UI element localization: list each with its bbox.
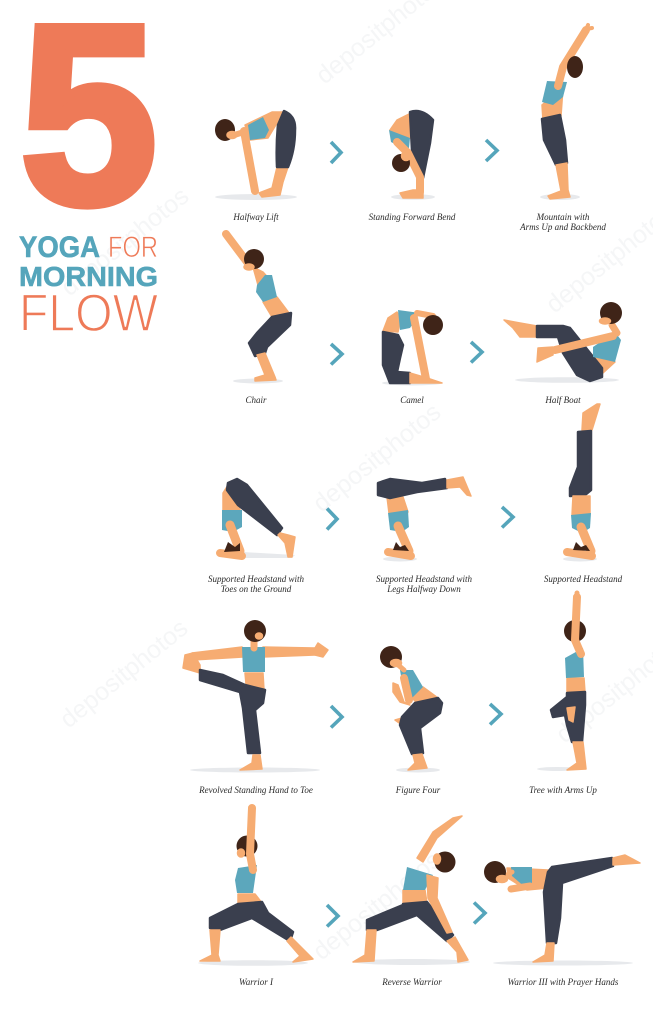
title block: [19, 0, 158, 343]
arrow: [474, 902, 485, 924]
arrow: [331, 344, 342, 364]
label: Camel: [400, 395, 424, 405]
label: Figure Four: [395, 785, 441, 795]
figure: Figure Four: [380, 646, 442, 772]
figure: Revolved Standing Hand to Toe: [183, 620, 328, 772]
label second line: Arms Up and Backbend: [519, 222, 606, 232]
arrow: [331, 142, 341, 163]
arrow: [471, 342, 482, 362]
label: Chair: [245, 395, 267, 405]
panel: Half Boat: [504, 302, 622, 405]
arrow: [331, 706, 342, 728]
figure: Reverse Warrior: [353, 816, 470, 965]
label: Tree with Arms Up: [529, 785, 597, 795]
panel: Reverse Warrior: [353, 816, 470, 987]
arrow: [490, 704, 501, 724]
heading word FLOW: FLOW: [19, 284, 158, 343]
panel: Camel: [382, 310, 443, 405]
panel: Chair: [226, 234, 291, 405]
label: Reverse Warrior: [381, 977, 442, 987]
panel: Standing Forward Bend: [369, 111, 456, 222]
label: Standing Forward Bend: [369, 212, 456, 222]
label: Halfway Lift: [232, 212, 279, 222]
arrow: [486, 140, 497, 161]
label: Warrior I: [239, 977, 274, 987]
label second line: Toes on the Ground: [221, 584, 292, 594]
panel: Halfway Lift: [215, 111, 297, 222]
panel: Tree with Arms Up: [529, 593, 597, 795]
figure: Supported Headstand: [563, 404, 600, 562]
figure: Halfway Lift: [215, 111, 297, 200]
figure: Warrior III with Prayer Hands: [484, 855, 640, 966]
figure: Mountain with Arms Up and Backbend: [540, 25, 592, 200]
figure: Standing Forward Bend: [389, 111, 435, 200]
panel: Warrior III with Prayer Hands: [484, 855, 640, 987]
label second line: Legs Halfway Down: [386, 584, 461, 594]
label: Mountain with: [536, 212, 590, 222]
label: Warrior III with Prayer Hands: [508, 977, 619, 987]
figure: Headstand with legs halfway: [378, 477, 471, 562]
figure: Tree with Arms Up: [537, 593, 586, 771]
panel: Supported Headstand with Legs Halfway Down: [376, 477, 472, 594]
heading word MORNING: MORNING: [19, 261, 158, 292]
panel: Supported Headstand: [544, 404, 623, 584]
figure: Chair: [226, 234, 291, 384]
label: Supported Headstand with: [376, 574, 472, 584]
label: Half Boat: [544, 395, 581, 405]
figure: Camel: [382, 310, 443, 386]
panel: Supported Headstand with Toes on the Ground: [208, 479, 304, 594]
watermark text: depositphotos: [56, 182, 194, 302]
panel: Warrior I: [198, 808, 313, 987]
arrow: [502, 507, 513, 528]
arrow: [327, 905, 338, 926]
figure: Headstand with toes down: [220, 479, 295, 558]
heading word FOR: FOR: [108, 231, 158, 264]
panel: Revolved Standing Hand to Toe: [183, 620, 328, 795]
panel: Mountain with Arms Up and Backbend: [519, 25, 606, 232]
label: Revolved Standing Hand to Toe: [198, 785, 313, 795]
heading word YOGA: YOGA: [19, 231, 100, 264]
arrow: [327, 508, 337, 530]
label: Supported Headstand: [544, 574, 623, 584]
watermark text: depositphotos: [308, 846, 446, 966]
figure: Warrior I: [198, 808, 313, 966]
figure: Half Boat: [504, 302, 622, 383]
watermark text: depositphotos: [55, 614, 193, 734]
panel: Figure Four: [380, 646, 442, 795]
watermark text: depositphotos: [308, 398, 446, 518]
label: Supported Headstand with: [208, 574, 304, 584]
